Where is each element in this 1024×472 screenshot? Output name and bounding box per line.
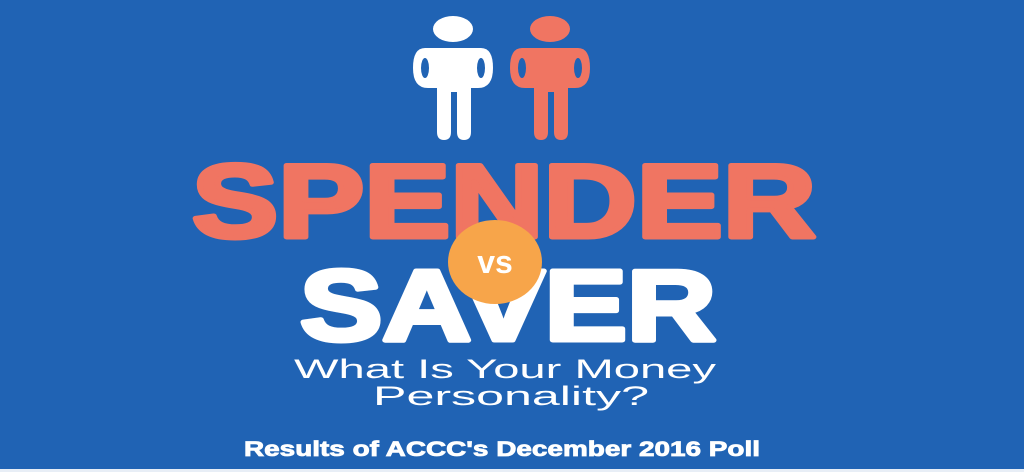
badge: vs [448, 220, 542, 304]
icon: white person (saver) [413, 16, 493, 140]
footer: poll source: Results of ACCC's December 2016 Poll [244, 438, 760, 461]
icon: orange person (spender) [510, 16, 590, 140]
badge: vs: vs [477, 244, 513, 280]
title: SPENDER: SPENDER [192, 144, 816, 260]
subtitle [294, 354, 717, 411]
subtitle: What Is Your Money [294, 354, 717, 384]
subtitle: Personality? [373, 381, 649, 411]
title: SAVER: SAVER [300, 250, 716, 362]
